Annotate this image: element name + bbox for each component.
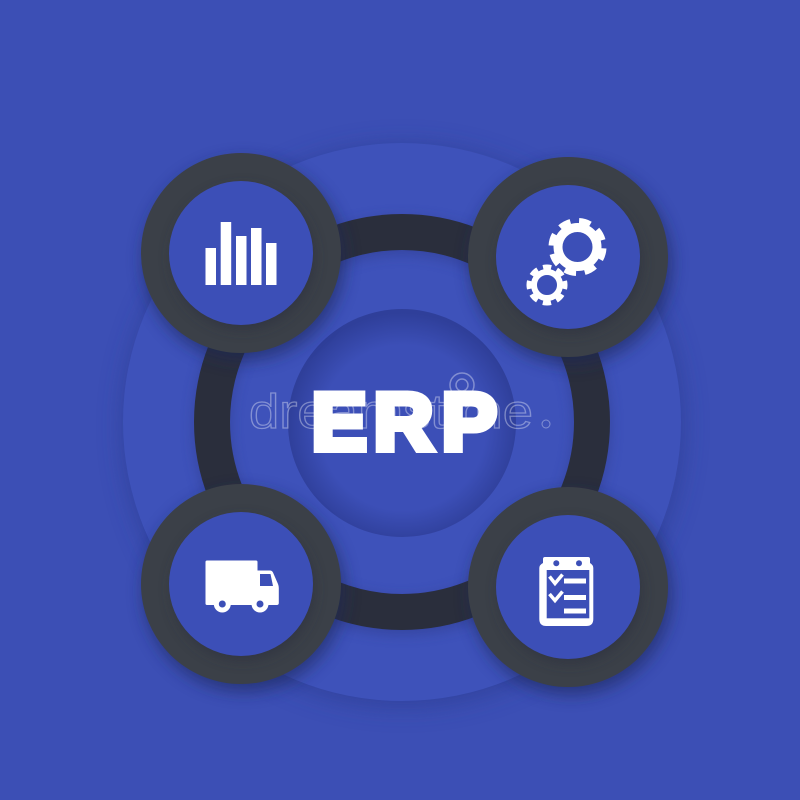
node: analytics: [141, 153, 345, 361]
icon: clipboard checklist: [539, 557, 593, 626]
node: checklist: [468, 487, 672, 695]
watermark: dreamstime: [249, 386, 533, 439]
title: ERP: ERP: [312, 377, 497, 467]
icon: bar chart: [206, 222, 276, 285]
connecting dark ring: [212, 232, 592, 616]
node: settings: [468, 157, 672, 365]
icon: truck: [206, 560, 279, 612]
large background circle: [122, 143, 684, 707]
icon: gears: [526, 220, 604, 306]
center circle: [288, 309, 516, 537]
node: delivery: [141, 484, 345, 692]
watermark: [249, 373, 550, 439]
